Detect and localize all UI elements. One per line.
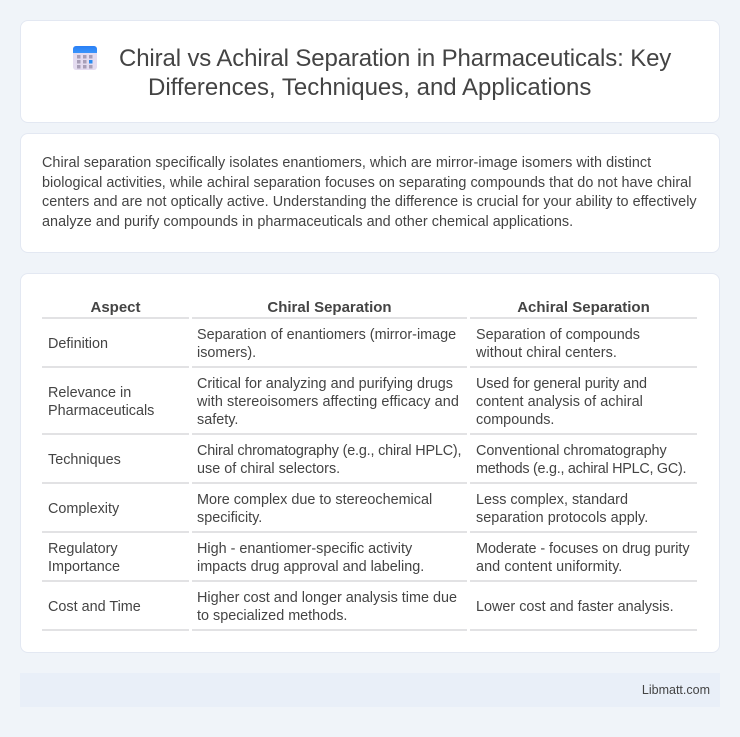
table header	[90, 299, 650, 316]
intro card	[20, 133, 720, 253]
table header: Aspect	[90, 299, 141, 316]
row: Relevance: safety.	[197, 412, 238, 428]
row: Complexity: Less complex, standard	[476, 492, 628, 508]
row: Complexity: specificity.	[197, 510, 262, 526]
row: Regulatory Importance: and content uniformity.	[476, 559, 622, 575]
intro text: Chiral separation specifically isolates enantiomers, which are mirror-image isomers with distinct	[42, 155, 651, 171]
row: Definition: without chiral centers.	[476, 345, 617, 361]
icon: calendar	[73, 46, 97, 70]
table header: Achiral Separation	[517, 299, 650, 316]
row: Relevance: Relevance in	[48, 385, 131, 401]
row: Cost and Time: Cost and Time	[48, 599, 141, 615]
row: Regulatory Importance: Importance	[48, 559, 120, 575]
row: Techniques: use of chiral selectors.	[197, 461, 340, 477]
row: Regulatory Importance: High - enantiomer-specific activity	[197, 541, 412, 557]
header card	[20, 20, 720, 123]
row: Complexity: More complex due to stereochemical	[197, 492, 432, 508]
row: Definition: Separation of enantiomers (mirror-image	[197, 327, 456, 343]
row: Regulatory Importance	[48, 541, 690, 575]
row: Definition: isomers).	[197, 345, 256, 361]
row: Techniques: methods (e.g., achiral HPLC, GC).	[476, 461, 686, 477]
row: Cost and Time: Lower cost and faster analysis.	[476, 599, 674, 615]
row: Regulatory Importance: Regulatory	[48, 541, 118, 557]
row: Relevance: Used for general purity and	[476, 376, 647, 392]
row: Cost and Time	[48, 590, 674, 624]
row: Cost and Time: Higher cost and longer analysis time due	[197, 590, 457, 606]
title: Chiral vs Achiral Separation in Pharmaceuticals: Key	[119, 45, 671, 72]
row: Techniques	[48, 443, 686, 477]
row: Complexity: Complexity	[48, 501, 119, 517]
row: Complexity	[48, 492, 648, 526]
row: Relevance: Pharmaceuticals	[48, 403, 154, 419]
row: Relevance: content analysis of achiral	[476, 394, 643, 410]
row: Techniques: Chiral chromatography (e.g., chiral HPLC),	[197, 443, 461, 459]
row: Regulatory Importance: impacts drug approval and labeling.	[197, 559, 424, 575]
row: Relevance: with stereoisomers affecting efficacy and	[197, 394, 459, 410]
title	[119, 45, 672, 101]
title: Differences, Techniques, and Applications	[148, 74, 591, 101]
comparison table card	[20, 273, 720, 653]
intro text	[42, 155, 697, 230]
footer text: Libmatt.com	[642, 683, 710, 697]
row: Relevance	[48, 376, 647, 428]
intro text: analyze and purify compounds in pharmaceuticals and other chemical applications.	[42, 214, 573, 230]
row: Regulatory Importance: Moderate - focuses on drug purity	[476, 541, 690, 557]
table header: Chiral Separation	[267, 299, 392, 316]
row: Cost and Time: to specialized methods.	[197, 608, 347, 624]
intro text: biological activities, while achiral separation focuses on separating compounds that do not have chiral	[42, 175, 691, 191]
row: Complexity: separation protocols apply.	[476, 510, 648, 526]
footer bar	[20, 673, 720, 707]
intro text: centers and are not optically active. Understanding the difference is crucial for your ability to effectively	[42, 194, 697, 210]
row: Relevance: compounds.	[476, 412, 554, 428]
row: Techniques: Conventional chromatography	[476, 443, 667, 459]
row: Techniques: Techniques	[48, 452, 121, 468]
row: Definition: Definition	[48, 336, 108, 352]
row: Definition	[48, 327, 640, 361]
row: Relevance: Critical for analyzing and purifying drugs	[197, 376, 453, 392]
row: Definition: Separation of compounds	[476, 327, 640, 343]
